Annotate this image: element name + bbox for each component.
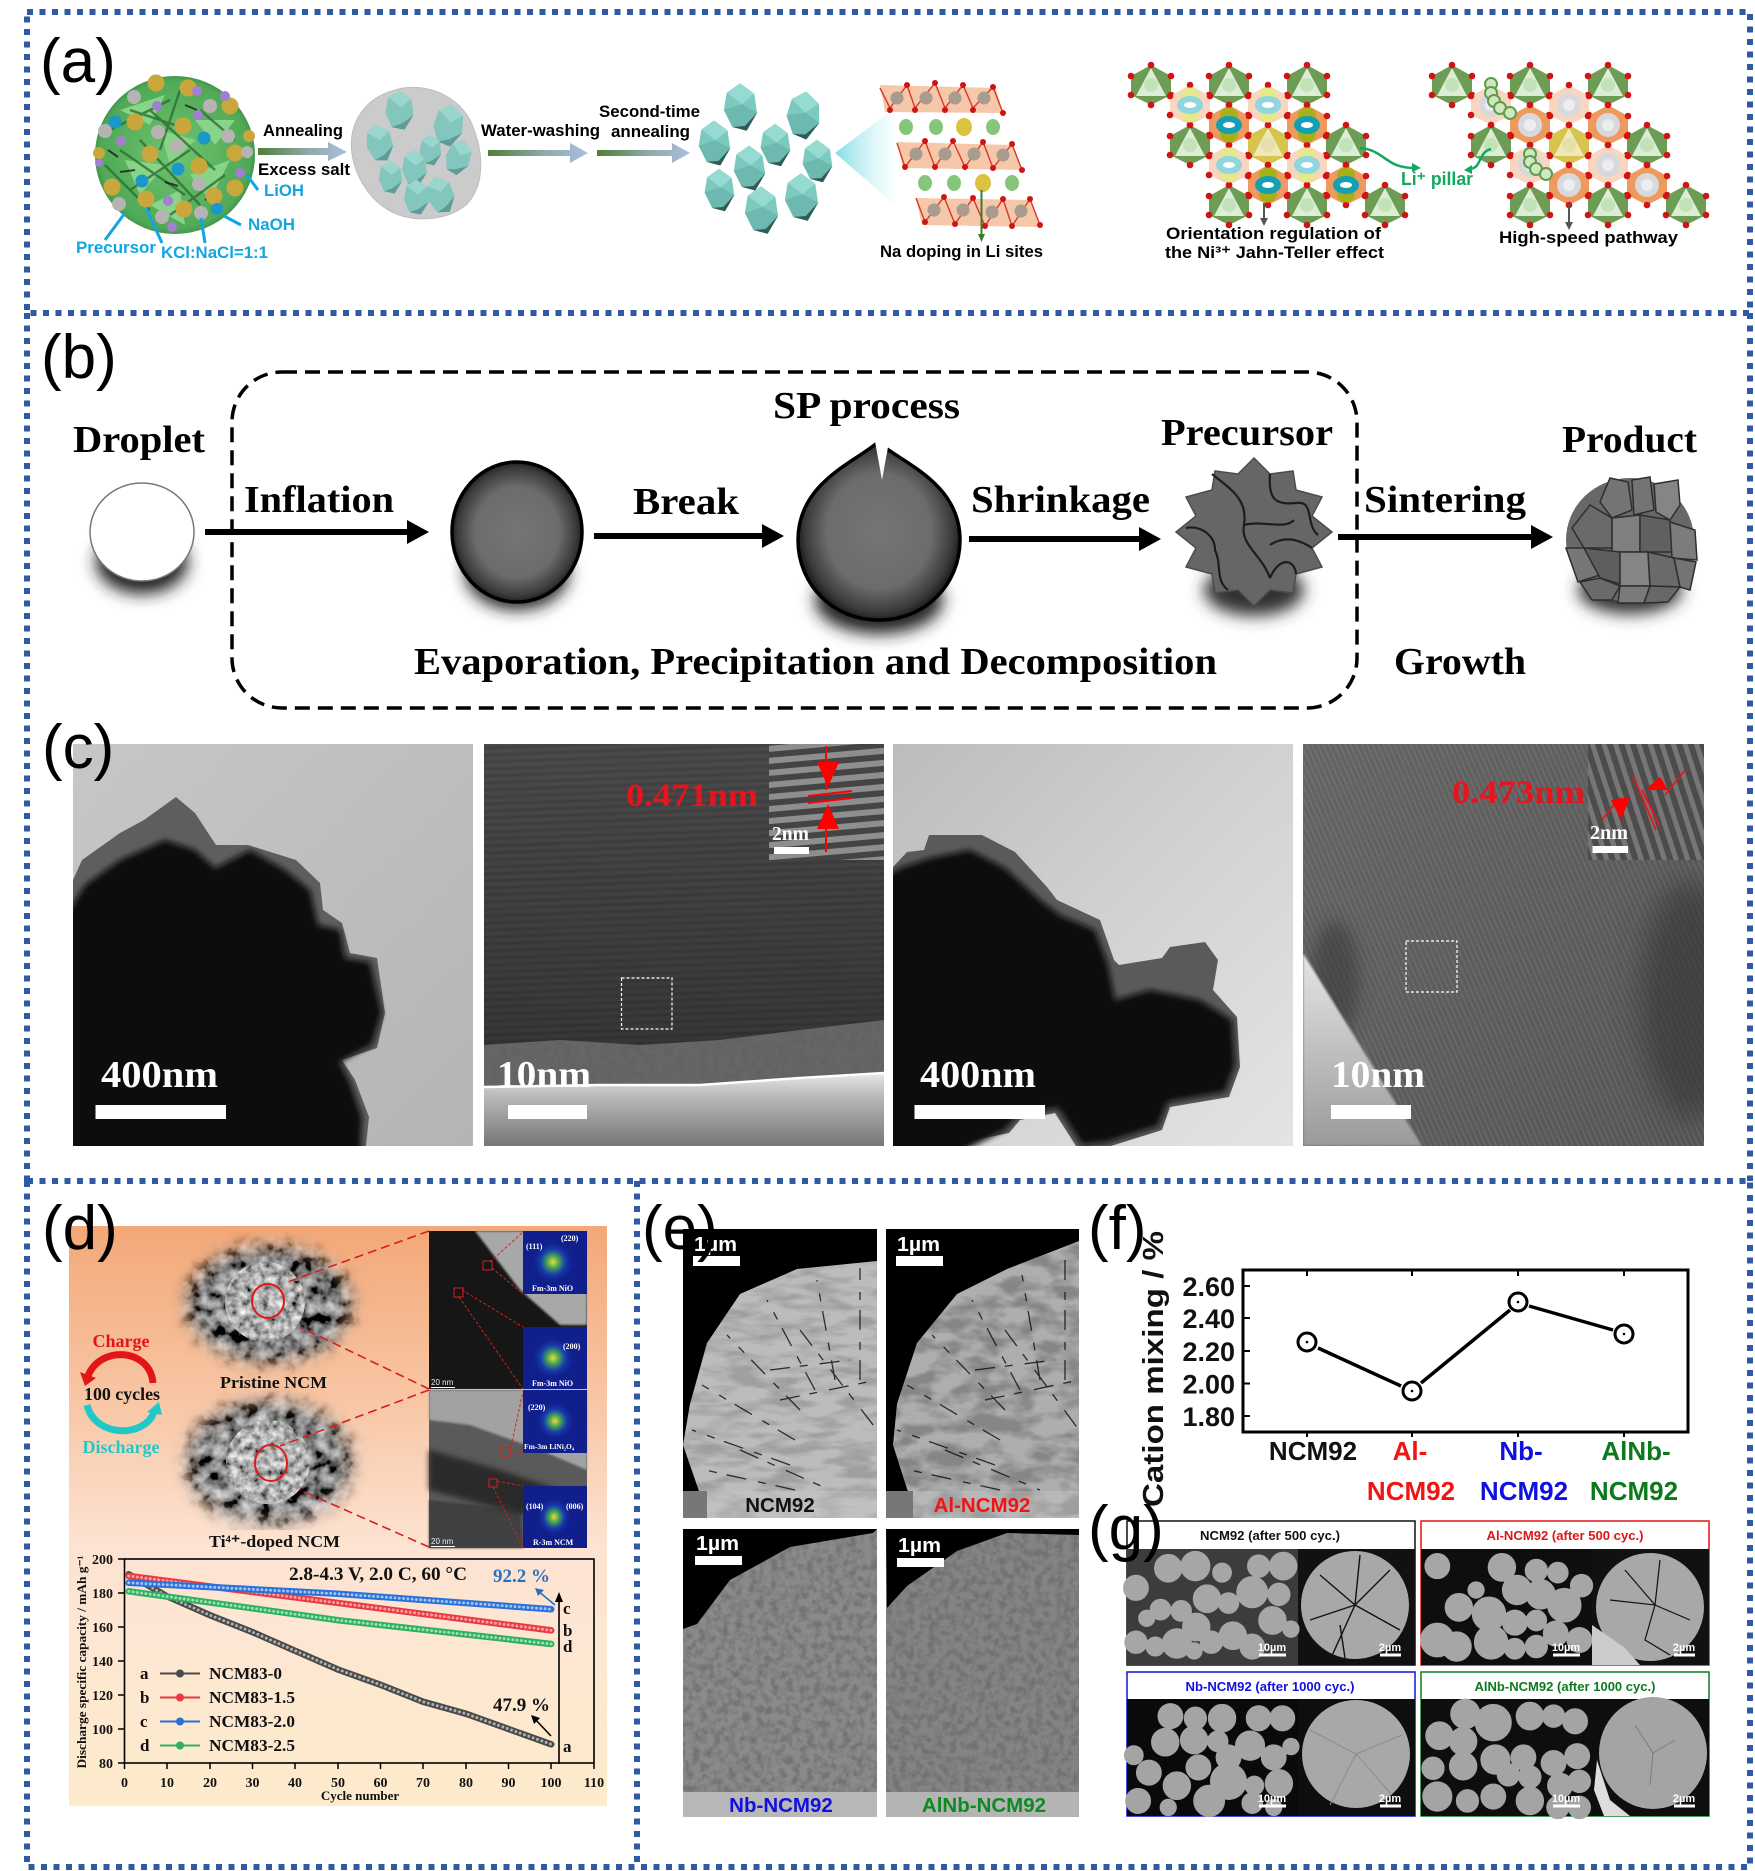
sub-panel: Nb-NCM92 after 1000 cycles xyxy=(1126,1672,1415,1816)
process text left: Second-time xyxy=(599,102,700,121)
chart annotations: a xyxy=(563,1737,572,1756)
y tick labels: 2.60 xyxy=(1182,1272,1235,1302)
arrow: annealing xyxy=(258,142,347,161)
sub-panel: Al-NCM92 after 500 cycles xyxy=(1421,1521,1709,1665)
image: AlNb-NCM92: 1µm xyxy=(898,1535,941,1557)
FFT insets: (200) xyxy=(563,1342,581,1351)
heading texts: Growth xyxy=(1394,641,1526,683)
sub-panel: NCM92 after 500 cycles: 10µm xyxy=(1258,1642,1286,1654)
sub-panel: Al-NCM92 after 500 cycles: 10µm xyxy=(1552,1642,1580,1654)
chart: discharge capacity: 50 xyxy=(331,1776,345,1791)
icon: wrinkled precursor xyxy=(1176,458,1332,616)
process text left: Annealing xyxy=(263,121,343,140)
process text left: Water-washing xyxy=(481,121,600,140)
image: HRTEM 0.471 nm: 0.471nm xyxy=(626,778,758,814)
chart: discharge capacity: 160 xyxy=(92,1621,113,1636)
process text left xyxy=(258,102,700,179)
frame: panel d, e, f, g xyxy=(27,1181,1750,1867)
image: Nb-NCM92: Nb-NCM92 xyxy=(729,1794,833,1817)
icon: precursor sphere with salts xyxy=(93,74,255,234)
Li pillar callout: Li⁺ pillar xyxy=(1401,169,1473,189)
sub-panel: Nb-NCM92 after 1000 cycles: Nb-NCM92 (after 1000 cyc.) xyxy=(1186,1679,1354,1694)
peach background xyxy=(69,1226,607,1806)
chart: discharge capacity: 90 xyxy=(502,1776,516,1791)
chart: discharge capacity: 80 xyxy=(99,1757,113,1772)
category labels: NCM92 xyxy=(1590,1476,1678,1506)
heading texts: Droplet xyxy=(73,419,205,461)
cycle arrows and text: Charge xyxy=(92,1331,150,1351)
chart annotations: 2.8-4.3 V, 2.0 C, 60 °C xyxy=(289,1564,467,1585)
red circles on SEM xyxy=(252,1284,287,1481)
panel f: cation mixing chart xyxy=(1088,1194,1688,1507)
chart: discharge capacity: 100 xyxy=(540,1776,562,1791)
arrow: break xyxy=(594,524,784,548)
FFT insets: (104) xyxy=(526,1502,544,1511)
icon: layered structure with Na doping xyxy=(880,80,1043,242)
TEM pictures: 20 nm xyxy=(431,1378,454,1387)
panel c: TEM images xyxy=(42,713,1740,1160)
heading texts: Inflation xyxy=(244,479,394,521)
chart legend: a xyxy=(140,1664,149,1683)
sub-panel: Nb-NCM92 after 1000 cycles: 10µm xyxy=(1258,1793,1286,1805)
chart annotations: 92.2 % xyxy=(493,1566,550,1587)
image: NCM92: NCM92 xyxy=(745,1494,815,1517)
series c xyxy=(129,1583,551,1609)
precursor labels: KCl:NaCl=1:1 xyxy=(161,243,268,262)
chart: discharge capacity: 180 xyxy=(92,1587,113,1602)
chart: discharge capacity: 70 xyxy=(416,1776,430,1791)
sub-panel: Al-NCM92 after 500 cycles: 2µm xyxy=(1673,1642,1695,1654)
chart: discharge capacity: 10 xyxy=(160,1776,174,1791)
sub-panel: Nb-NCM92 after 1000 cycles: 2µm xyxy=(1379,1793,1401,1805)
image: Nb-NCM92: 1µm xyxy=(696,1533,739,1555)
label (d): (d) xyxy=(42,1194,118,1263)
heading texts: Break xyxy=(633,481,740,523)
lattice captions xyxy=(1165,224,1679,262)
particle captions: Pristine NCM xyxy=(220,1373,327,1392)
chart: discharge capacity: 20 xyxy=(203,1776,217,1791)
label: Na doping: Na doping in Li sites xyxy=(880,242,1043,261)
data line xyxy=(1298,1293,1633,1400)
image: Nb-NCM92 xyxy=(683,1529,877,1817)
FFT insets: Fm-3m NiO xyxy=(532,1379,573,1388)
panel a: synthesis schematic xyxy=(27,12,1750,313)
frame: panel a xyxy=(27,12,1750,313)
dashed SP process box xyxy=(232,372,1357,708)
icon: droplet xyxy=(90,483,194,594)
FFT insets: (111) xyxy=(526,1242,543,1251)
label (c): (c) xyxy=(42,713,114,782)
Li pillar callout xyxy=(1360,148,1491,189)
arrow: water-washing xyxy=(488,143,588,163)
image: Al-NCM92 xyxy=(886,1229,1079,1518)
chart annotations xyxy=(289,1564,573,1764)
panel e: SEM cross sections xyxy=(642,1194,1079,1817)
image: HRTEM 0.473 nm xyxy=(1303,744,1740,1146)
icon: salt blob with crystals xyxy=(351,87,481,219)
category labels: NCM92 xyxy=(1269,1436,1357,1466)
FFT insets: Fm-3m LiNi₂O₄ xyxy=(524,1442,575,1451)
label (a): (a) xyxy=(40,27,116,96)
TEM pictures xyxy=(429,1231,587,1548)
heading texts: SP process xyxy=(773,385,960,427)
image: TEM low-mag 2 xyxy=(880,744,1293,1160)
y tick labels: 1.80 xyxy=(1182,1402,1235,1432)
chart legend: d xyxy=(140,1736,150,1755)
precursor labels: LiOH xyxy=(264,181,304,200)
image: TEM low-mag 1 xyxy=(60,744,473,1160)
image: AlNb-NCM92: AlNb-NCM92 xyxy=(922,1794,1046,1817)
image: HRTEM 0.473 nm: 2nm xyxy=(1590,822,1628,844)
particle captions: Ti⁴⁺-doped NCM xyxy=(209,1532,340,1551)
y tick labels: 2.20 xyxy=(1182,1337,1235,1367)
frame: panels b and c xyxy=(27,313,1750,1181)
image: HRTEM 0.473 nm: 10nm xyxy=(1331,1054,1425,1096)
precursor labels: NaOH xyxy=(248,215,295,234)
panel g: post-cycling SEM xyxy=(1088,1494,1709,1817)
icon: sintered product xyxy=(1566,477,1697,614)
process text left: Excess salt xyxy=(258,160,350,179)
chart: discharge capacity: 200 xyxy=(92,1553,113,1568)
lattice captions: Orientation regulation of xyxy=(1166,224,1381,243)
chart: discharge capacity: Cycle number xyxy=(321,1788,399,1803)
FFT insets: (220) xyxy=(528,1403,546,1412)
heading texts: Evaporation, Precipitation and Decomposition xyxy=(414,641,1217,683)
sub-panel: AlNb-NCM92 after 1000 cycles: 10µm xyxy=(1552,1793,1580,1805)
series b xyxy=(129,1576,551,1630)
small red boxes and connectors xyxy=(454,1232,523,1548)
chart annotations: d xyxy=(563,1637,573,1656)
image: Al-NCM92: Al-NCM92 xyxy=(934,1494,1030,1517)
series d xyxy=(129,1591,551,1644)
category labels xyxy=(1269,1436,1678,1506)
category labels: Nb- xyxy=(1499,1436,1543,1466)
image: HRTEM 0.471 nm: 10nm xyxy=(497,1054,591,1096)
y tick labels: 2.00 xyxy=(1182,1370,1235,1400)
chart legend: c xyxy=(140,1712,148,1731)
icon: lattice with high-speed pathway xyxy=(1429,62,1709,230)
plot frame and ticks xyxy=(1243,1270,1688,1437)
chart legend: NCM83-0 xyxy=(209,1664,282,1683)
sub-panel: AlNb-NCM92 after 1000 cycles xyxy=(1421,1672,1709,1817)
FFT insets xyxy=(523,1231,587,1548)
y tick labels xyxy=(1182,1272,1235,1432)
image: HRTEM 0.471 nm xyxy=(484,744,884,1146)
sub-panel: Al-NCM92 after 500 cycles: Al-NCM92 (after 500 cyc.) xyxy=(1486,1528,1644,1543)
chart: discharge capacity: 80 xyxy=(459,1776,473,1791)
series a xyxy=(129,1574,551,1744)
precursor labels: Precursor xyxy=(76,238,156,257)
cycle arrows and text xyxy=(80,1331,162,1457)
arrow: shrinkage xyxy=(969,527,1161,551)
heading texts xyxy=(73,385,1697,683)
arrow: sintering xyxy=(1338,525,1553,549)
heading texts: Sintering xyxy=(1364,479,1526,521)
image: Al-NCM92: 1µm xyxy=(897,1234,940,1256)
arrow: second annealing xyxy=(597,143,690,163)
image: TEM low-mag 2: 400nm xyxy=(920,1054,1036,1096)
SEM ellipses xyxy=(170,1230,370,1530)
red zoom lines xyxy=(280,1231,429,1547)
chart: discharge capacity: 100 xyxy=(92,1723,113,1738)
chart: discharge capacity: 40 xyxy=(288,1776,302,1791)
particle captions xyxy=(209,1373,340,1551)
arrow: inflation xyxy=(205,520,429,544)
label (f): (f) xyxy=(1088,1194,1147,1263)
cycle arrows and text: Discharge xyxy=(83,1437,160,1457)
sub-panel: NCM92 after 500 cycles xyxy=(1125,1521,1415,1665)
image: TEM low-mag 1: 400nm xyxy=(101,1054,218,1096)
sub-panel: NCM92 after 500 cycles: 2µm xyxy=(1379,1642,1401,1654)
chart annotations: b xyxy=(563,1621,572,1640)
sub-panel: AlNb-NCM92 after 1000 cycles: AlNb-NCM92 (after 1000 cyc.) xyxy=(1474,1679,1656,1694)
y axis title: Cation mixing / % xyxy=(1138,1231,1170,1507)
heading texts: Product xyxy=(1562,419,1697,461)
icon: broken particle xyxy=(798,436,960,634)
image: NCM92: 1µm xyxy=(694,1234,737,1256)
sub-panel: AlNb-NCM92 after 1000 cycles: 2µm xyxy=(1673,1793,1695,1805)
TEM pictures: 20 nm xyxy=(431,1537,454,1546)
sub-panel: NCM92 after 500 cycles: NCM92 (after 500 cyc.) xyxy=(1200,1528,1340,1543)
icon: separated crystals xyxy=(699,83,832,234)
chart: discharge capacity: 30 xyxy=(246,1776,260,1791)
chart legend: NCM83-1.5 xyxy=(209,1688,295,1707)
chart legend: NCM83-2.5 xyxy=(209,1736,295,1755)
heading texts: Precursor xyxy=(1161,412,1333,454)
chart legend: NCM83-2.0 xyxy=(209,1712,295,1731)
light cone xyxy=(835,108,895,205)
category labels: NCM92 xyxy=(1367,1476,1455,1506)
chart: discharge capacity: 140 xyxy=(92,1655,113,1670)
FFT insets: R-3m NCM xyxy=(533,1538,574,1547)
category labels: Al- xyxy=(1393,1436,1427,1466)
image: NCM92 xyxy=(683,1229,877,1518)
image: HRTEM 0.473 nm: 0.473nm xyxy=(1452,775,1585,811)
label (g): (g) xyxy=(1088,1494,1164,1563)
chart annotations: 47.9 % xyxy=(493,1695,550,1716)
chart: discharge capacity xyxy=(75,1553,604,1803)
y tick labels: 2.40 xyxy=(1182,1304,1235,1334)
icon: lattice with Jahn-Teller orbitals xyxy=(1128,62,1408,228)
FFT insets: (006) xyxy=(566,1502,584,1511)
image: AlNb-NCM92 xyxy=(886,1529,1079,1817)
process text left: annealing xyxy=(611,122,690,141)
label (e): (e) xyxy=(642,1194,718,1263)
panel d: Ti-doped NCM xyxy=(27,1181,1750,1867)
panel b: spray pyrolysis process xyxy=(27,313,1750,1181)
chart: discharge capacity: 60 xyxy=(374,1776,388,1791)
chart: discharge capacity: Discharge specific capacity / mAh g⁻¹ xyxy=(75,1555,89,1768)
lattice captions: the Ni³⁺ Jahn-Teller effect xyxy=(1165,243,1384,262)
lattice captions: High-speed pathway xyxy=(1499,228,1679,247)
image: HRTEM 0.471 nm: 2nm xyxy=(772,823,809,845)
precursor labels xyxy=(76,181,304,262)
chart annotations: c xyxy=(563,1599,571,1618)
category labels: NCM92 xyxy=(1480,1476,1568,1506)
chart: discharge capacity: 110 xyxy=(584,1776,604,1791)
heading texts: Shrinkage xyxy=(971,479,1150,521)
category labels: AlNb- xyxy=(1601,1436,1671,1466)
chart legend xyxy=(140,1664,295,1755)
cycle arrows and text: 100 cycles xyxy=(84,1384,160,1404)
chart legend: b xyxy=(140,1688,149,1707)
chart: discharge capacity: 0 xyxy=(121,1776,128,1791)
FFT insets: Fm-3m NiO xyxy=(532,1284,573,1293)
blue pointer arrows xyxy=(105,175,258,243)
label (b): (b) xyxy=(41,323,117,392)
FFT insets: (220) xyxy=(561,1234,579,1243)
chart: discharge capacity: 120 xyxy=(92,1689,113,1704)
icon: inflated particle xyxy=(452,462,582,610)
